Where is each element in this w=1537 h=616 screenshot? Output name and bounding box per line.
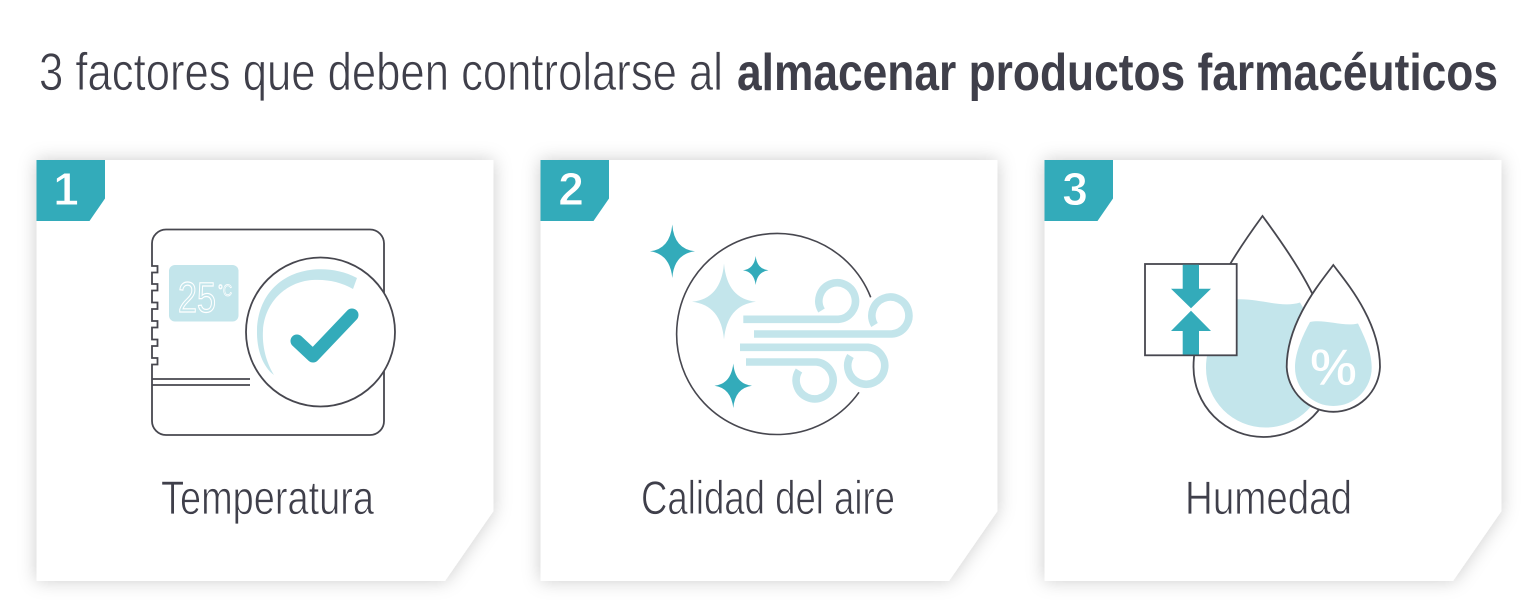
title — [39, 43, 1498, 102]
small drop with percent: % — [1310, 339, 1357, 397]
card background — [540, 160, 998, 581]
card background — [1044, 160, 1502, 581]
sparkles — [650, 224, 768, 408]
display with temperature: °C — [218, 281, 232, 300]
number badge 3 — [1044, 160, 1113, 221]
icon: clean air — [650, 224, 909, 434]
dial circle with check — [246, 258, 395, 406]
large drop — [1194, 216, 1334, 437]
small drop with percent — [1287, 265, 1380, 412]
number badge 2: 2 — [558, 163, 584, 215]
label: Temperatura — [161, 471, 375, 524]
card background — [36, 160, 494, 581]
icon: humidity drops — [1145, 216, 1380, 437]
wind lines — [740, 283, 909, 399]
title: 3 factores que deben controlarse al — [39, 43, 723, 102]
panel: calidad del aire — [540, 160, 998, 581]
number badge 2 — [540, 160, 609, 221]
panel: humedad — [1044, 160, 1502, 581]
pressure square with arrows — [1145, 264, 1237, 355]
label: Calidad del aire — [641, 471, 895, 524]
number badge 1: 1 — [53, 163, 79, 215]
icon: thermostat — [152, 230, 395, 435]
number badge 3: 3 — [1062, 163, 1088, 215]
number badge 1 — [36, 160, 105, 221]
display with temperature: 25 — [178, 274, 216, 322]
panel: temperatura — [36, 160, 494, 581]
display with temperature — [169, 265, 238, 322]
label: Humedad — [1185, 471, 1352, 524]
